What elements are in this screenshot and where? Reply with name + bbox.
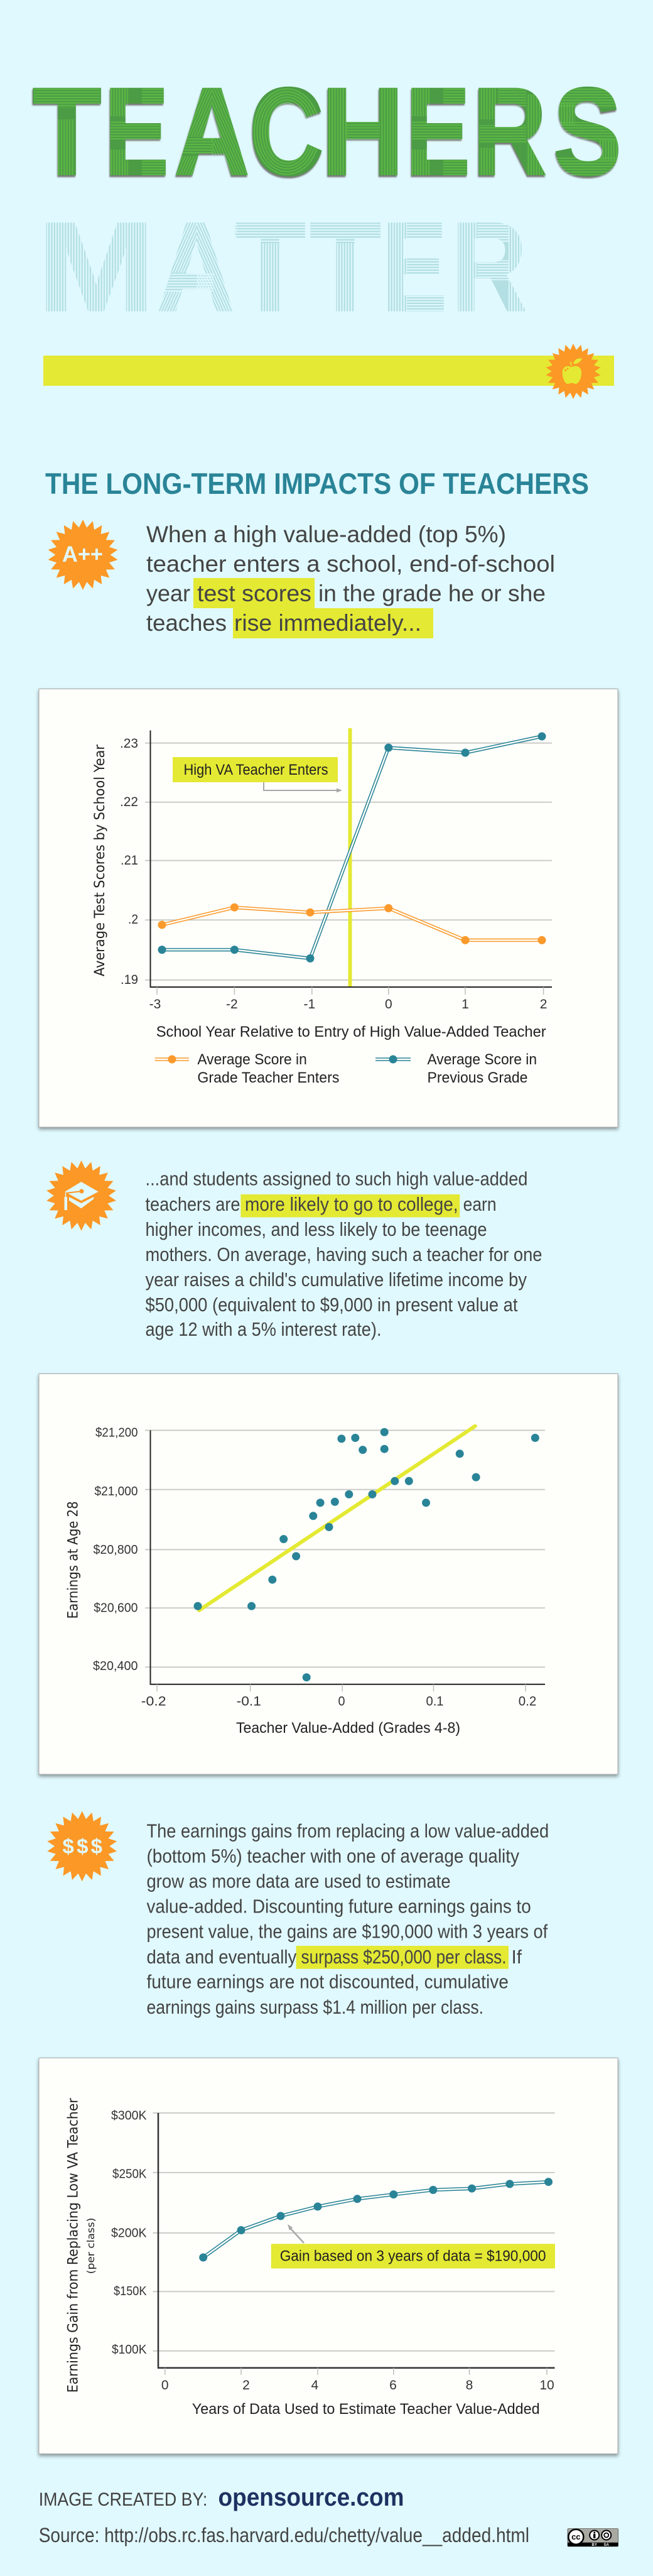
- text block: earnings paragraph: present value, the gains are $190,000 with 3 years of: [147, 1921, 548, 1943]
- title: MATTER: T: [235, 196, 306, 337]
- legend: grade teacher enters: [155, 1051, 339, 1086]
- x ticks and labels: 8: [466, 2378, 473, 2393]
- text block: college paragraph: age 12 with a 5% interest rate).: [146, 1318, 382, 1340]
- text block: earnings paragraph: value-added. Discounting future earnings gains to: [147, 1895, 531, 1918]
- icon: creative commons badge: [568, 2528, 618, 2547]
- title: TEACHERS: H: [321, 62, 404, 201]
- gridlines and y tick labels: [120, 736, 552, 987]
- x ticks and labels: 2: [242, 2378, 250, 2393]
- title: TEACHERS: A: [175, 62, 249, 201]
- gridlines and y tick labels: $250K: [112, 2168, 147, 2181]
- x ticks and labels: -3: [149, 997, 161, 1012]
- gridlines and y tick labels: [111, 2109, 555, 2357]
- y axis subtitle: (per class): [85, 2218, 97, 2274]
- x ticks and labels: -2: [226, 997, 238, 1012]
- text block: intro paragraph: teaches: [146, 610, 227, 636]
- callout: High VA Teacher Enters: High VA Teacher Enters: [183, 761, 328, 778]
- panel: test scores chart: [39, 689, 618, 1127]
- x axis title: School Year Relative to Entry of High Value-Added Teacher: [156, 1023, 546, 1040]
- gridlines and y tick labels: $20,400: [93, 1659, 138, 1673]
- callout: gain based on 3 years: [271, 2224, 555, 2268]
- text block: intro paragraph: year: [146, 581, 190, 606]
- x ticks and labels: 1: [461, 997, 469, 1012]
- icon: creative commons badge: BY: [592, 2543, 597, 2547]
- callout: High VA Teacher Enters: [173, 757, 342, 793]
- gridlines and y tick labels: .23: [120, 736, 138, 751]
- panel: earnings gain chart: [39, 2058, 618, 2454]
- text block: college paragraph: year raises a child's cumulative lifetime income by: [146, 1269, 527, 1291]
- title: TEACHERS: [33, 62, 622, 201]
- title: TEACHERS: S: [554, 62, 622, 201]
- icon: creative commons badge: cc: [571, 2532, 581, 2541]
- icon: dollars badge: [47, 1811, 117, 1881]
- text block: intro paragraph: in the grade he or she: [318, 581, 546, 606]
- text block: college paragraph: more likely to go to college,: [245, 1193, 458, 1215]
- scatter points: [193, 1428, 539, 1681]
- x ticks and labels: 4: [311, 2378, 319, 2393]
- yellow banner bar: [43, 356, 614, 386]
- text block: intro paragraph: [146, 521, 555, 638]
- text block: college paragraph: $50,000 (equivalent to $9,000 in present value at: [146, 1294, 518, 1316]
- axes: [151, 1430, 545, 1684]
- gridlines and y tick labels: $100K: [112, 2343, 147, 2357]
- x axis title: Teacher Value-Added (Grades 4-8): [236, 1720, 460, 1737]
- trend line: [199, 1426, 475, 1610]
- x ticks and labels: 2: [540, 997, 547, 1012]
- text block: college paragraph: ...and students assigned to such high value-added: [146, 1167, 527, 1190]
- text block: intro paragraph: teacher enters a school, end-of-school: [146, 551, 555, 577]
- x ticks and labels: [161, 2368, 554, 2393]
- x ticks and labels: [149, 987, 547, 1012]
- x ticks and labels: 0: [161, 2378, 169, 2393]
- credit line: IMAGE CREATED BY:: [39, 2489, 207, 2510]
- text block: college paragraph: [146, 1167, 542, 1340]
- x ticks and labels: 10: [539, 2378, 554, 2393]
- title: MATTER: M: [38, 196, 154, 337]
- x ticks and labels: -0.2: [141, 1695, 166, 1709]
- x ticks and labels: 0.1: [426, 1695, 443, 1709]
- legend: grade teacher enters: Grade Teacher Enters: [197, 1069, 339, 1086]
- gridlines and y tick labels: $20,600: [94, 1601, 138, 1615]
- text block: college paragraph: teachers are: [146, 1193, 240, 1215]
- heading: THE LONG-TERM IMPACTS OF TEACHERS: [45, 467, 589, 500]
- legend: grade teacher enters: Average Score in: [197, 1051, 307, 1068]
- gridlines and y tick labels: [93, 1426, 545, 1673]
- title: TEACHERS: C: [249, 62, 324, 201]
- credit line: opensource.com: [219, 2484, 404, 2511]
- teacher entry line: [348, 728, 352, 987]
- gridlines and y tick labels: .19: [121, 973, 138, 987]
- text block: earnings paragraph: data and eventually: [147, 1946, 297, 1968]
- y axis title: Earnings at Age 28: [65, 1501, 82, 1618]
- text block: earnings paragraph: The earnings gains from replacing a low value-added: [147, 1820, 549, 1842]
- y axis title: Average Test Scores by School Year: [92, 744, 108, 976]
- gridlines and y tick labels: $21,000: [94, 1485, 138, 1498]
- series: previous grade: [158, 733, 546, 963]
- title: TEACHERS: R: [472, 63, 547, 201]
- series: earnings gain: [199, 2178, 553, 2262]
- x ticks and labels: [141, 1684, 536, 1709]
- x ticks and labels: 0.2: [519, 1695, 536, 1709]
- icon: apple badge: [546, 344, 601, 399]
- panel: earnings scatter chart: [39, 1373, 618, 1774]
- title: TEACHERS: T: [33, 62, 101, 201]
- gridlines and y tick labels: .21: [121, 853, 138, 868]
- gridlines and y tick labels: $200K: [111, 2226, 147, 2240]
- text block: intro paragraph: rise immediately...: [234, 610, 421, 636]
- icon: creative commons badge: SA: [604, 2543, 610, 2547]
- gridlines and y tick labels: $150K: [114, 2284, 147, 2298]
- title: MATTER: E: [382, 197, 447, 338]
- gridlines and y tick labels: .22: [120, 795, 138, 809]
- x ticks and labels: 6: [389, 2378, 397, 2393]
- legend: previous grade: [375, 1051, 537, 1086]
- text block: intro paragraph: test scores: [197, 581, 311, 606]
- title: MATTER: T: [310, 196, 381, 337]
- icon: A++ badge: [48, 520, 117, 590]
- source line: Source: http://obs.rc.fas.harvard.edu/chetty/value__added.html: [39, 2524, 529, 2546]
- text block: earnings paragraph: future earnings are not discounted, cumulative: [147, 1971, 509, 1993]
- axes: [151, 730, 552, 987]
- text block: earnings paragraph: [147, 1820, 549, 2018]
- x ticks and labels: -1: [303, 997, 315, 1012]
- icon: A++ badge: A++: [62, 542, 103, 567]
- title: TEACHERS: E: [104, 62, 169, 201]
- y axis title: Earnings Gain from Replacing Low VA Teacher: [65, 2097, 82, 2393]
- x ticks and labels: 0: [338, 1695, 345, 1709]
- text block: college paragraph: earn: [463, 1193, 497, 1215]
- x ticks and labels: -0.1: [237, 1695, 261, 1709]
- text block: earnings paragraph: (bottom 5%) teacher with one of average quality: [147, 1845, 519, 1867]
- gridlines and y tick labels: $20,800: [93, 1543, 138, 1557]
- text block: intro paragraph: When a high value-added (top 5%): [146, 521, 506, 547]
- text block: earnings paragraph: grow as more data are used to estimate: [147, 1870, 451, 1892]
- series: grade teacher enters: [158, 903, 546, 944]
- gridlines and y tick labels: $300K: [111, 2109, 147, 2122]
- title: MATTER: [38, 196, 529, 338]
- text block: earnings paragraph: earnings gains surpass $1.4 million per class.: [147, 1996, 483, 2018]
- icon: dollars badge: $$$: [63, 1835, 102, 1858]
- callout: gain based on 3 years: Gain based on 3 years of data = $190,000: [280, 2248, 546, 2265]
- legend: previous grade: Average Score in: [427, 1051, 537, 1068]
- icon: graduation cap badge: [46, 1160, 116, 1231]
- text block: college paragraph: mothers. On average, having such a teacher for one: [146, 1243, 542, 1265]
- gridlines and y tick labels: $21,200: [95, 1426, 138, 1440]
- legend: previous grade: Previous Grade: [427, 1069, 527, 1086]
- x axis title: Years of Data Used to Estimate Teacher Value-Added: [192, 2401, 540, 2418]
- title: MATTER: R: [451, 196, 527, 337]
- gridlines and y tick labels: .2: [128, 912, 138, 927]
- text block: college paragraph: higher incomes, and less likely to be teenage: [146, 1218, 487, 1240]
- title: MATTER: A: [157, 197, 235, 337]
- text block: earnings paragraph: If: [511, 1946, 522, 1968]
- text block: earnings paragraph: surpass $250,000 per class.: [301, 1946, 506, 1968]
- credit line: [39, 2484, 404, 2511]
- axes: [158, 2113, 555, 2368]
- x ticks and labels: 0: [385, 997, 392, 1012]
- title: TEACHERS: E: [406, 62, 470, 201]
